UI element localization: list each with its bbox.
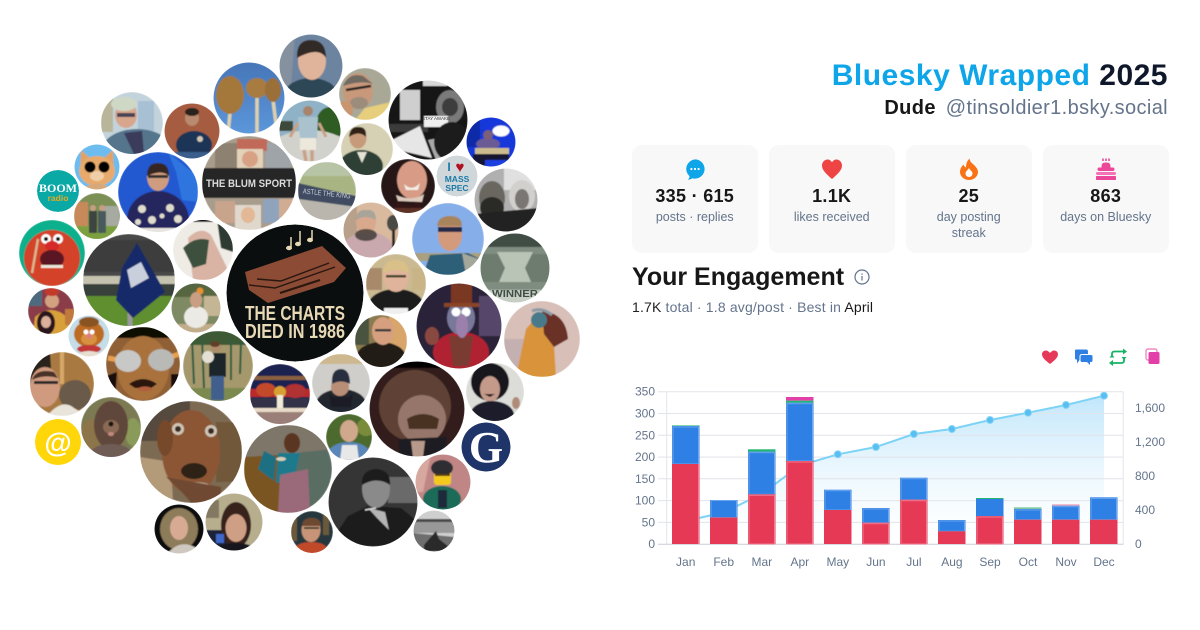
avatar: man with glasses resting on hand [337, 68, 391, 120]
avatar: yellow @ logo [35, 419, 81, 465]
avatar: I love Mass Spec badge: MASS [445, 174, 470, 184]
avatar: Astle the King banner [298, 162, 356, 221]
avatar: The Charts Died in 1986 coffin: DIED IN 1986 [245, 321, 345, 343]
avatar: lego minifigure [415, 454, 471, 512]
avatar: man with glasses in orange shirt [291, 511, 333, 556]
avatar: man in dark suit [341, 123, 393, 175]
avatar: orange cat with sunglasses [74, 144, 120, 190]
left axis labels: 150 [635, 472, 655, 486]
avatar: Animal muppet [19, 220, 85, 286]
panel: likes received [769, 145, 894, 253]
avatar: Boom Radio logo: BOOM [39, 181, 77, 195]
avatar: bald man with glasses at home [355, 315, 407, 367]
month labels: Jan [676, 555, 695, 569]
engagement summary: 1.7K total · 1.8 avg/post · Best in April [632, 299, 873, 315]
avatar: dollar bill engraving: WINNER [492, 289, 539, 300]
avatar: restaurant food display [250, 364, 310, 426]
icon: heart [822, 160, 842, 179]
month labels: Mar [751, 555, 772, 569]
avatar: dollar bill engraving [480, 233, 550, 304]
panel: posts and replies: posts · replies [656, 210, 734, 224]
avatar: I love Mass Spec badge: I [447, 160, 451, 174]
avatar: black and white stay awake scene [388, 80, 470, 162]
avatar: smiling woman with dark hair [206, 494, 262, 550]
icon: repost legend [1112, 352, 1124, 363]
avatar: blond man with glasses [366, 254, 426, 314]
panel: days on Bluesky: 863 [1090, 186, 1121, 206]
avatar: couple in colourful clothes [28, 288, 75, 335]
right axis labels: 1,200 [1135, 435, 1165, 449]
bar: Jul [900, 478, 928, 544]
avatar: Guardian G logo: G [469, 423, 503, 472]
panel: likes received: 1.1K [812, 186, 851, 206]
left axis labels: 350 [635, 385, 655, 399]
avatar: smiling man selfie [280, 34, 342, 98]
panel: posts and replies: 335 · 615 [655, 186, 734, 206]
bar: Feb [710, 500, 738, 544]
bar: Nov [1052, 504, 1080, 544]
month labels: Apr [790, 555, 809, 569]
avatar: yellow @ logo: @ [44, 427, 72, 458]
avatar: woman holding dog by fence [183, 331, 253, 402]
avatar: man with glasses and grey cat [30, 352, 94, 416]
panel: days on Bluesky: days on Bluesky [1060, 210, 1151, 224]
avatar: hand and flowers [173, 219, 233, 280]
right axis labels: 0 [1135, 537, 1142, 551]
right axis labels: 800 [1135, 469, 1155, 483]
right axis labels [1135, 401, 1165, 551]
heading: Your Engagement: Your Engagement [632, 263, 844, 291]
avatar: Astle the King banner: ASTLE THE KING [302, 187, 351, 200]
panel: days on Bluesky [1043, 145, 1168, 253]
avatar: curly-haired woman on black [154, 504, 204, 554]
left axis labels: 250 [635, 428, 655, 442]
month labels: Dec [1093, 555, 1115, 569]
avatar: Humphrey Bogart black and white [328, 457, 418, 547]
left axis labels: 100 [635, 494, 655, 508]
panel: posts and replies [632, 145, 758, 253]
avatar: black and white stay awake scene: STAY AWAKE [422, 116, 450, 121]
icon: info [854, 269, 870, 285]
avatar: Fozzie Bear [68, 316, 110, 356]
panel: day posting streak: day posting [937, 210, 1001, 224]
month labels [676, 555, 1115, 569]
avatar: man in floral shirt on blue set [118, 152, 198, 232]
bar: Jun [862, 508, 890, 544]
avatar: The Blum Sport collage: THE BLUM SPORT [206, 178, 292, 190]
icon: quotes legend [1146, 349, 1157, 360]
avatar: mirrored sunglasses moustache man [106, 327, 180, 401]
month labels: Jun [866, 555, 886, 569]
left axis labels: 200 [635, 450, 655, 464]
avatar: black and white beach [413, 510, 455, 552]
month labels: May [826, 555, 849, 569]
chart legend [1042, 348, 1160, 366]
user handle line: Dude @tinsoldier1.bsky.social [884, 97, 1168, 119]
left axis labels: 0 [648, 537, 655, 551]
avatar: two men in black and white [474, 168, 538, 232]
month labels: Nov [1055, 555, 1077, 569]
bar: Sep [976, 498, 1004, 544]
avatar: teasels against blue sky [213, 62, 285, 134]
right axis labels: 1,600 [1135, 401, 1165, 415]
icon: heart legend [1042, 350, 1058, 364]
avatar: The Charts Died in 1986 coffin: THE CHARTS [245, 303, 345, 325]
bar: Oct [1014, 507, 1042, 544]
bubble cluster of avatars [19, 34, 580, 554]
left axis labels [635, 385, 655, 551]
month labels: Feb [713, 555, 734, 569]
avatar: bald man in denim shirt [326, 414, 375, 466]
left axis labels: 50 [642, 515, 655, 529]
panel: likes received: likes received [794, 210, 870, 224]
stacked bars by month [672, 397, 1118, 544]
panel: day posting streak: 25 [958, 186, 979, 206]
avatar: man in cap and denim jacket [101, 92, 163, 154]
avatar: man on a boat [279, 100, 344, 162]
avatar: man with black hair and moustache [466, 363, 524, 429]
panel: day posting streak: streak [952, 226, 986, 240]
avatar: bald man in cafe [171, 283, 221, 334]
avatar: quiz show contestant cartoon [466, 117, 516, 168]
icon: flame [960, 158, 978, 180]
avatar: men in garden [74, 193, 120, 240]
avatar: The Blum Sport collage [202, 136, 296, 230]
cumulative line [686, 392, 1108, 521]
right axis labels: 400 [1135, 503, 1155, 517]
title: Bluesky Wrapped 2025 [832, 59, 1168, 92]
month labels: Aug [941, 555, 963, 569]
bar: May [824, 490, 852, 544]
avatar: I love Mass Spec badge: SPEC [445, 183, 469, 193]
avatar: surprised brown dog [140, 401, 242, 503]
avatar: man in dark beanie [312, 354, 370, 419]
avatar: I love Mass Spec badge: ♥ [456, 159, 465, 176]
avatar: hairy man grimacing [369, 361, 465, 457]
avatar: laughing man with bow tie [381, 159, 435, 214]
cumulative area [686, 396, 1104, 544]
bar: Dec [1090, 497, 1118, 544]
avatar: brown curly dog [81, 397, 141, 462]
month labels: Jul [906, 555, 922, 569]
bar: Jan [672, 425, 700, 544]
avatar: I love Mass Spec badge [436, 156, 478, 196]
bar: Apr [786, 397, 814, 544]
icon: chat bubble [686, 159, 705, 180]
panel: day posting streak [906, 145, 1032, 253]
bar: Aug [938, 520, 966, 544]
avatar: Boom Radio logo: radio [48, 193, 68, 203]
icon: birthday cake [1096, 158, 1116, 180]
avatar: cartoon horse with headphones [504, 301, 580, 377]
avatar: man in cap and sunglasses under blue sky [412, 203, 484, 275]
avatar: man in headphones with microphone [344, 202, 398, 258]
avatar: man against brick wall [164, 103, 220, 160]
avatar: blue and white flag in stadium [83, 234, 175, 328]
avatar: Gonzo in top hat [416, 283, 502, 372]
bar: Mar [748, 449, 776, 544]
month labels: Sep [979, 555, 1001, 569]
left axis labels: 300 [635, 406, 655, 420]
avatar: Guardian G logo [462, 422, 510, 472]
avatar: woman in teal in a dim room [244, 425, 332, 513]
month labels: Oct [1019, 555, 1038, 569]
avatar: Boom Radio logo [37, 170, 79, 212]
avatar: The Charts Died in 1986 coffin [226, 224, 364, 362]
icon: replies legend [1075, 350, 1092, 365]
